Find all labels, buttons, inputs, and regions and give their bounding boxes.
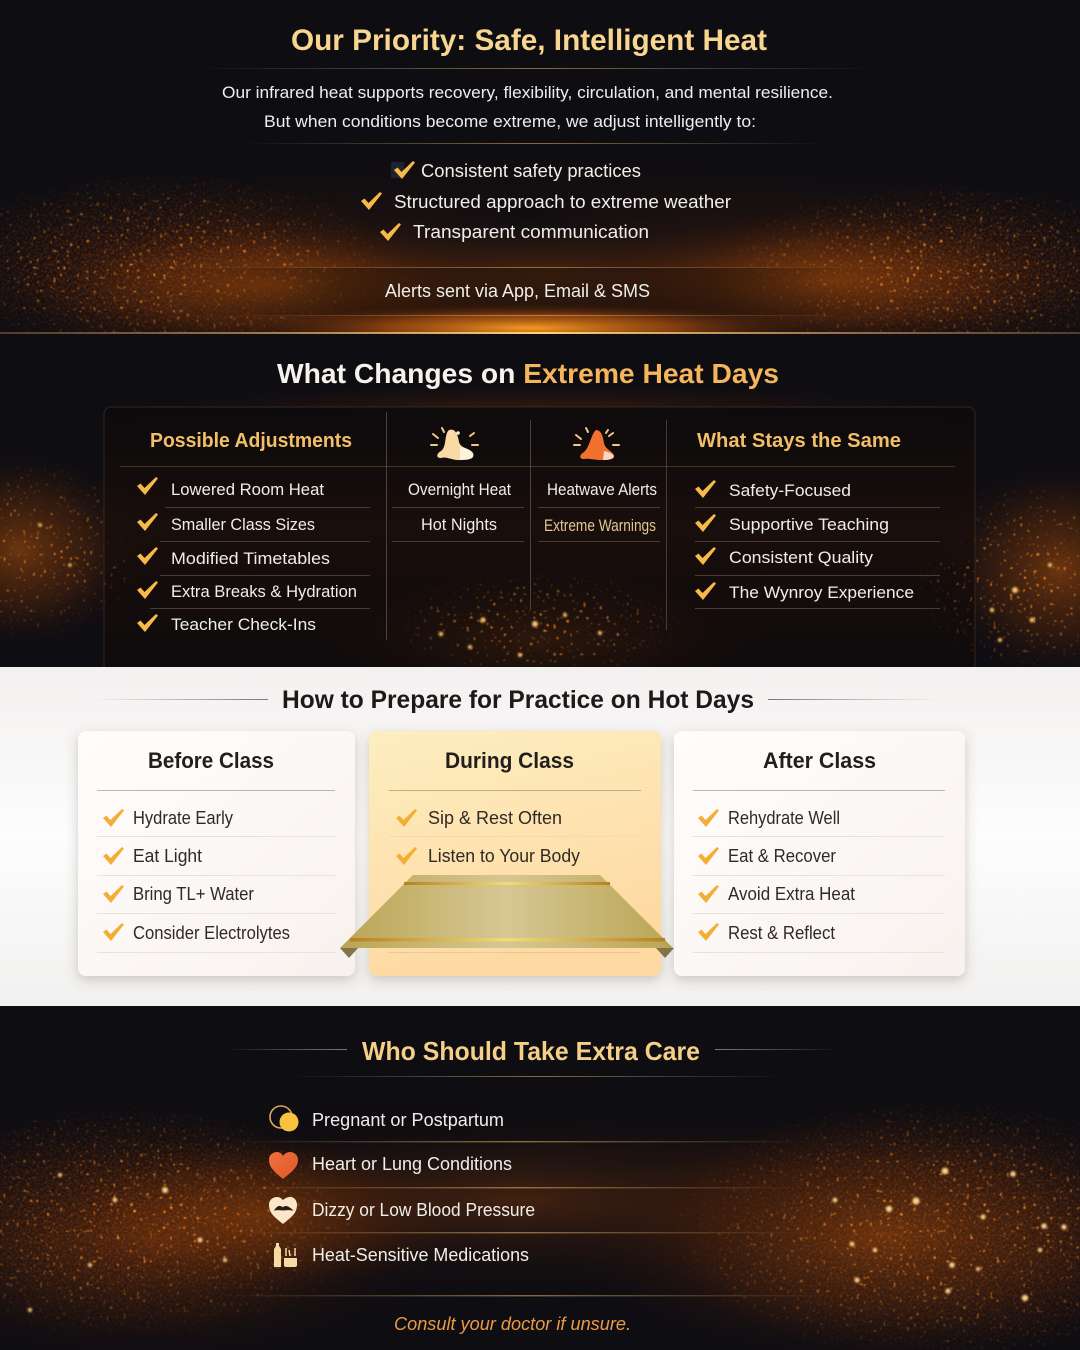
- card: before class: Eat Light: [133, 846, 202, 866]
- card: after class: Eat & Recover: [728, 846, 836, 866]
- card: after class: Rest & Reflect: [728, 923, 835, 943]
- consult note: Consult your doctor if unsure.: [394, 1314, 631, 1334]
- column: possible adjustments: Teacher Check-Ins: [171, 615, 316, 634]
- comparison table panel: [104, 406, 976, 667]
- heading: How to Prepare for Practice on Hot Days: [282, 686, 754, 714]
- card: before class: Consider Electrolytes: [133, 923, 290, 943]
- column: possible adjustments: Smaller Class Sizes: [171, 515, 315, 534]
- column: possible adjustments: Possible Adjustments: [150, 430, 352, 452]
- icon: heat bell cream: [431, 428, 478, 460]
- panel: our priority section: [0, 28, 1080, 334]
- bright sparks: [28, 1168, 1067, 1312]
- card: after class: Avoid Extra Heat: [728, 884, 855, 904]
- risk list: Pregnant or Postpartum: [312, 1110, 504, 1130]
- icon: pregnant: [270, 1106, 298, 1132]
- column: possible adjustments: Lowered Room Heat: [171, 480, 324, 499]
- column: possible adjustments: [137, 430, 370, 634]
- column: what stays the same: [695, 430, 940, 609]
- card: before class: Before Class: [148, 748, 274, 773]
- risk list: Heat-Sensitive Medications: [312, 1245, 529, 1265]
- column: heatwave alerts: Extreme Warnings: [544, 516, 656, 535]
- alert channels note: Alerts sent via App, Email & SMS: [385, 281, 650, 301]
- bright sparks: [38, 523, 1052, 657]
- priority checklist: Transparent communication: [413, 222, 649, 242]
- priority checklist: [361, 161, 731, 242]
- intro text: But when conditions become extreme, we adjust intelligently to:: [264, 112, 756, 131]
- column: what stays the same: Consistent Quality: [729, 548, 874, 567]
- priority checklist: Consistent safety practices: [421, 161, 641, 181]
- column: what stays the same: What Stays the Same: [697, 430, 901, 452]
- icon: medications: [274, 1243, 297, 1267]
- card: during class: During Class: [445, 748, 574, 773]
- card: during class: [369, 731, 661, 976]
- column: possible adjustments: Modified Timetables: [171, 549, 330, 568]
- icon: heart: [269, 1152, 298, 1179]
- card: after class: After Class: [763, 748, 876, 773]
- intro text: Our infrared heat supports recovery, flexibility, circulation, and mental resilience.: [222, 83, 833, 102]
- card: during class: Listen to Your Body: [428, 846, 580, 866]
- panel: extreme heat days section: [0, 333, 1080, 710]
- icon: heat bell orange: [574, 428, 619, 460]
- panel: prepare section: [0, 667, 1080, 1006]
- column: heatwave alerts: Heatwave Alerts: [547, 480, 657, 499]
- column: what stays the same: Safety-Focused: [729, 481, 851, 500]
- gold trapezoid overlay: [340, 875, 674, 958]
- column: possible adjustments: Extra Breaks & Hydration: [171, 582, 357, 601]
- heading: Who Should Take Extra Care: [362, 1036, 700, 1066]
- icon: dizzy heart: [269, 1197, 297, 1224]
- card: before class: [78, 731, 355, 976]
- column: heatwave alerts: [538, 428, 660, 542]
- card: after class: [674, 731, 965, 976]
- ember glow background: [0, 176, 1080, 333]
- heading: What Changes on Extreme Heat Days: [277, 358, 779, 389]
- card: during class: Sip & Rest Often: [428, 808, 562, 828]
- card: after class: Rehydrate Well: [728, 808, 840, 828]
- risk list: Heart or Lung Conditions: [312, 1154, 512, 1174]
- risk list: [235, 1106, 805, 1267]
- column: what stays the same: Supportive Teaching: [729, 515, 889, 534]
- column: overnight heat: Hot Nights: [421, 515, 497, 534]
- ember background: [0, 333, 1080, 680]
- column: overnight heat: [392, 428, 524, 542]
- column: overnight heat: Overnight Heat: [408, 480, 511, 499]
- risk list: Dizzy or Low Blood Pressure: [312, 1200, 535, 1220]
- card: before class: Hydrate Early: [133, 808, 233, 828]
- title: Our Priority: Safe, Intelligent Heat: [291, 24, 767, 57]
- priority checklist: Structured approach to extreme weather: [394, 192, 731, 212]
- card: before class: Bring TL+ Water: [133, 884, 254, 904]
- column: what stays the same: The Wynroy Experience: [729, 583, 914, 602]
- intro text: [222, 83, 833, 131]
- ember background: [0, 1100, 1080, 1350]
- panel: extra care section: [0, 1041, 1080, 1350]
